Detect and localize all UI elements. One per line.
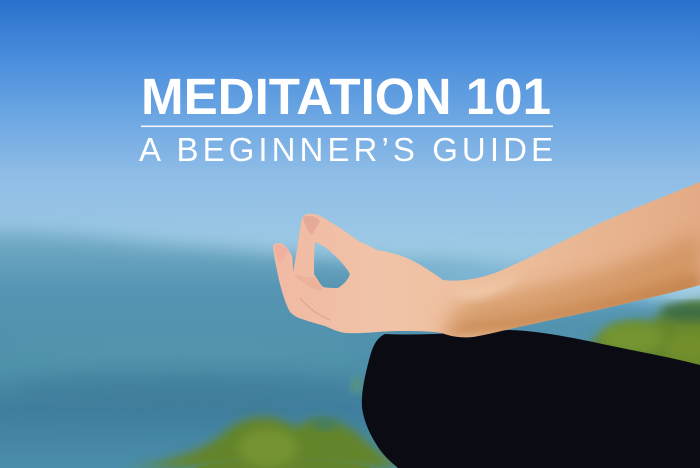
subtitle: A BEGINNER’S GUIDE	[139, 131, 553, 168]
blurred mountains	[0, 231, 700, 468]
divider rule	[141, 126, 553, 127]
foliage: right side	[585, 296, 700, 372]
foliage: bottom centre	[125, 377, 400, 468]
meditating hand and arm	[273, 182, 700, 338]
title: MEDITATION 101	[141, 68, 551, 125]
black leggings knee	[362, 330, 700, 468]
